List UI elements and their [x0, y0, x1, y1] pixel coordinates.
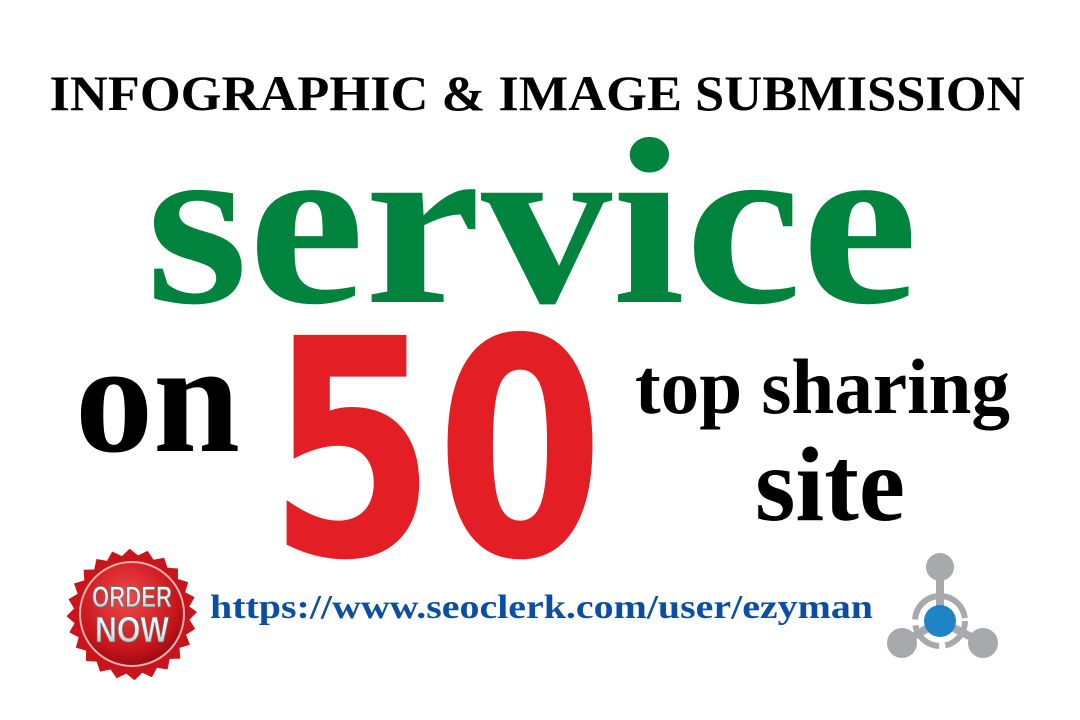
- text: on: on: [75, 311, 240, 486]
- icon: order now badge: [67, 549, 197, 680]
- text: top sharing: top sharing: [635, 343, 1010, 430]
- title: INFOGRAPHIC & IMAGE SUBMISSION: [50, 65, 1024, 121]
- heading: service: service: [146, 91, 918, 354]
- text: site: site: [755, 426, 905, 543]
- url text: https://www.seoclerk.com/user/ezyman: [210, 589, 873, 626]
- icon: network: [887, 553, 998, 658]
- icon: order now badge: NOW: [95, 609, 169, 650]
- icon: order now badge: ORDER: [92, 581, 172, 614]
- number: 50: 50: [268, 276, 604, 627]
